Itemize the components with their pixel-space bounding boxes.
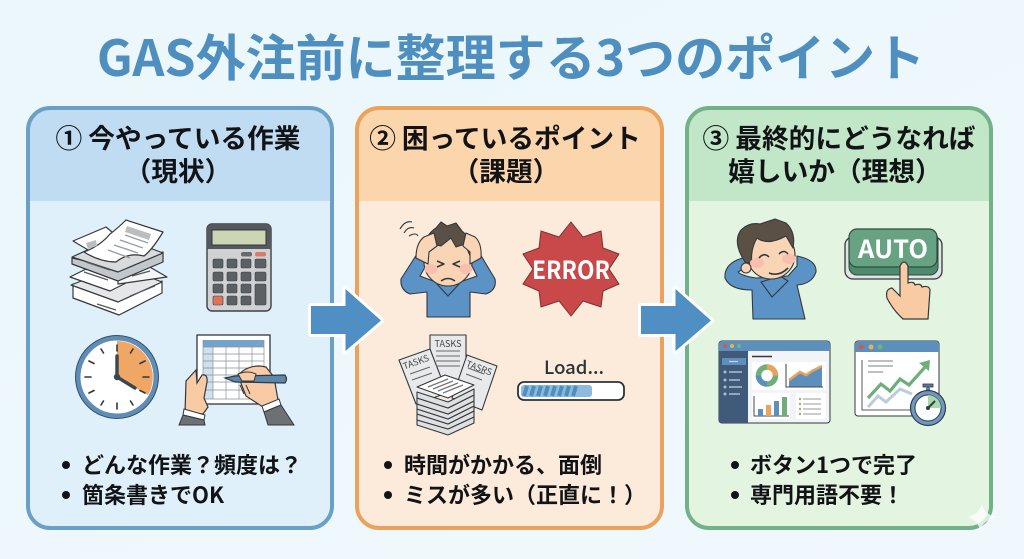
icon: task pile xyxy=(399,335,497,435)
panel: current work xyxy=(28,108,332,528)
icon: clock xyxy=(76,336,158,418)
bullet list: problems: 時間がかかる、面倒 xyxy=(404,448,602,480)
icon: dashboard window xyxy=(719,341,830,423)
panel: ideal outcome xyxy=(687,108,991,528)
heading: current work: ① 今やっている作業 xyxy=(56,117,301,156)
icon: ERROR burst xyxy=(523,222,619,316)
icon: calculator xyxy=(207,224,271,311)
heading: problems xyxy=(369,117,641,189)
icon: growth chart with stopwatch xyxy=(855,341,946,426)
icon: AUTO button with pointing hand xyxy=(845,229,942,319)
bullet list: current work: 箇条書きでOK xyxy=(82,478,225,510)
bullet list: ideal outcome: 専門用語不要！ xyxy=(750,478,904,510)
icon: ERROR burst: ERROR xyxy=(532,251,610,287)
icon: task pile: TASKS xyxy=(435,337,461,350)
bullet list: current work: どんな作業？頻度は？ xyxy=(82,448,302,480)
heading: ideal outcome: 嬉しいか（理想） xyxy=(728,150,942,189)
icon: task pile: TASKS xyxy=(401,351,431,372)
bullet list: problems xyxy=(384,448,646,510)
arrow: current work to problems xyxy=(311,289,381,351)
heading: current work: （現状） xyxy=(125,150,231,189)
heading: problems: （課題） xyxy=(453,150,559,189)
bullet list: ideal outcome xyxy=(731,448,917,510)
icon: AUTO button with pointing hand: AUTO xyxy=(857,230,928,266)
arrow: problems to ideal outcome xyxy=(641,289,711,351)
title: GAS外注前に整理する3つのポイント xyxy=(97,19,925,91)
icon: task pile: TASRS xyxy=(464,357,494,378)
icon: happy man xyxy=(725,219,816,319)
heading: problems: ② 困っているポイント xyxy=(369,117,641,156)
icon: spreadsheet and writing hands xyxy=(179,335,294,425)
icon: loading bar xyxy=(518,354,624,400)
panel: problems xyxy=(357,108,662,528)
heading: ideal outcome: ③ 最終的にどうなれば xyxy=(703,117,976,156)
bullet list: ideal outcome: ボタン1つで完了 xyxy=(750,448,917,480)
bullet list: problems: ミスが多い（正直に！） xyxy=(404,478,646,510)
icon: troubled man xyxy=(400,222,495,317)
heading: ideal outcome xyxy=(703,117,976,189)
icon: loading bar: Load... xyxy=(544,354,604,380)
bullet list: current work xyxy=(62,448,302,510)
icon: paper stack xyxy=(70,220,167,315)
heading: current work xyxy=(56,117,301,189)
